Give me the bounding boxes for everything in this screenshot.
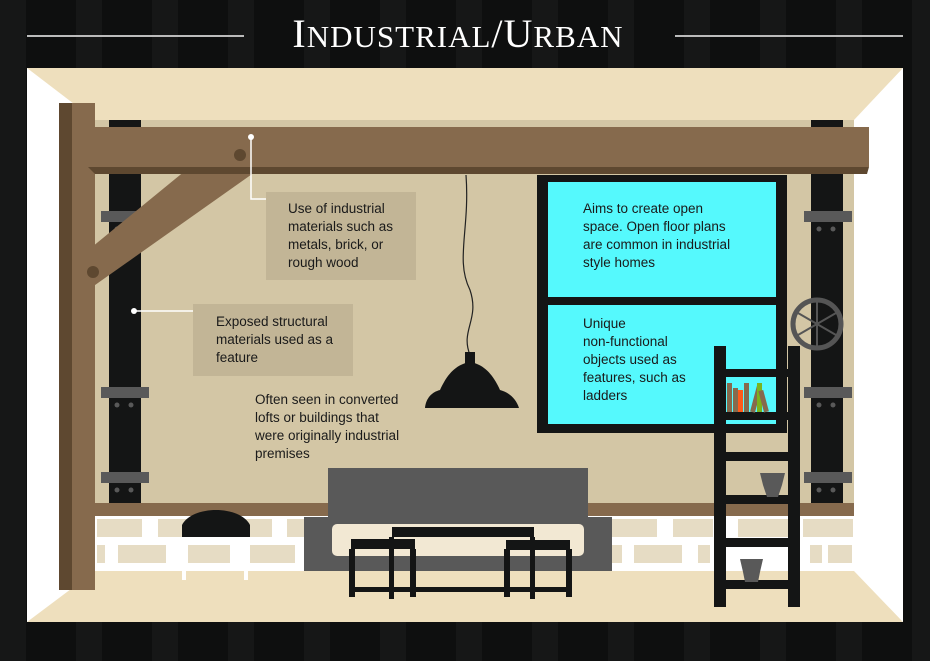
pipes bbox=[101, 120, 852, 503]
sofa bbox=[304, 468, 612, 571]
window: ladders bbox=[583, 388, 628, 403]
callout: exposed structural bbox=[131, 304, 353, 376]
window: Unique bbox=[583, 316, 626, 331]
title: INDUSTRIAL/URBAN bbox=[292, 11, 624, 56]
callout: industrial materials: rough wood bbox=[288, 255, 359, 270]
icon: valve wheel bbox=[793, 300, 841, 348]
text: converted lofts: premises bbox=[255, 446, 310, 461]
beams bbox=[59, 103, 869, 590]
ladder bbox=[714, 346, 800, 607]
window: are common in industrial bbox=[583, 237, 730, 252]
text: converted lofts: were originally industrial bbox=[254, 428, 399, 443]
window: space. Open floor plans bbox=[583, 219, 726, 234]
callout: industrial materials: metals, brick, or bbox=[288, 237, 384, 252]
stool bbox=[182, 510, 250, 580]
window: objects used as bbox=[583, 352, 677, 367]
window: non-functional bbox=[583, 334, 668, 349]
text: converted lofts: Often seen in converted bbox=[255, 392, 398, 407]
callout: industrial materials: materials such as bbox=[288, 219, 393, 234]
window: features, such as bbox=[583, 370, 686, 385]
callout: exposed structural: materials used as a bbox=[216, 332, 334, 347]
window: style homes bbox=[583, 255, 655, 270]
callout: exposed structural: Exposed structural bbox=[216, 314, 328, 329]
callout: industrial materials bbox=[248, 134, 416, 280]
text: converted lofts bbox=[254, 392, 399, 461]
lamp bbox=[425, 175, 519, 408]
callout: exposed structural: feature bbox=[216, 350, 258, 365]
callout: industrial materials: Use of industrial bbox=[288, 201, 385, 216]
text: converted lofts: lofts or buildings that bbox=[255, 410, 379, 425]
window bbox=[537, 175, 787, 433]
room bbox=[27, 68, 903, 622]
coffee table bbox=[349, 527, 572, 599]
window: Aims to create open bbox=[583, 201, 703, 216]
